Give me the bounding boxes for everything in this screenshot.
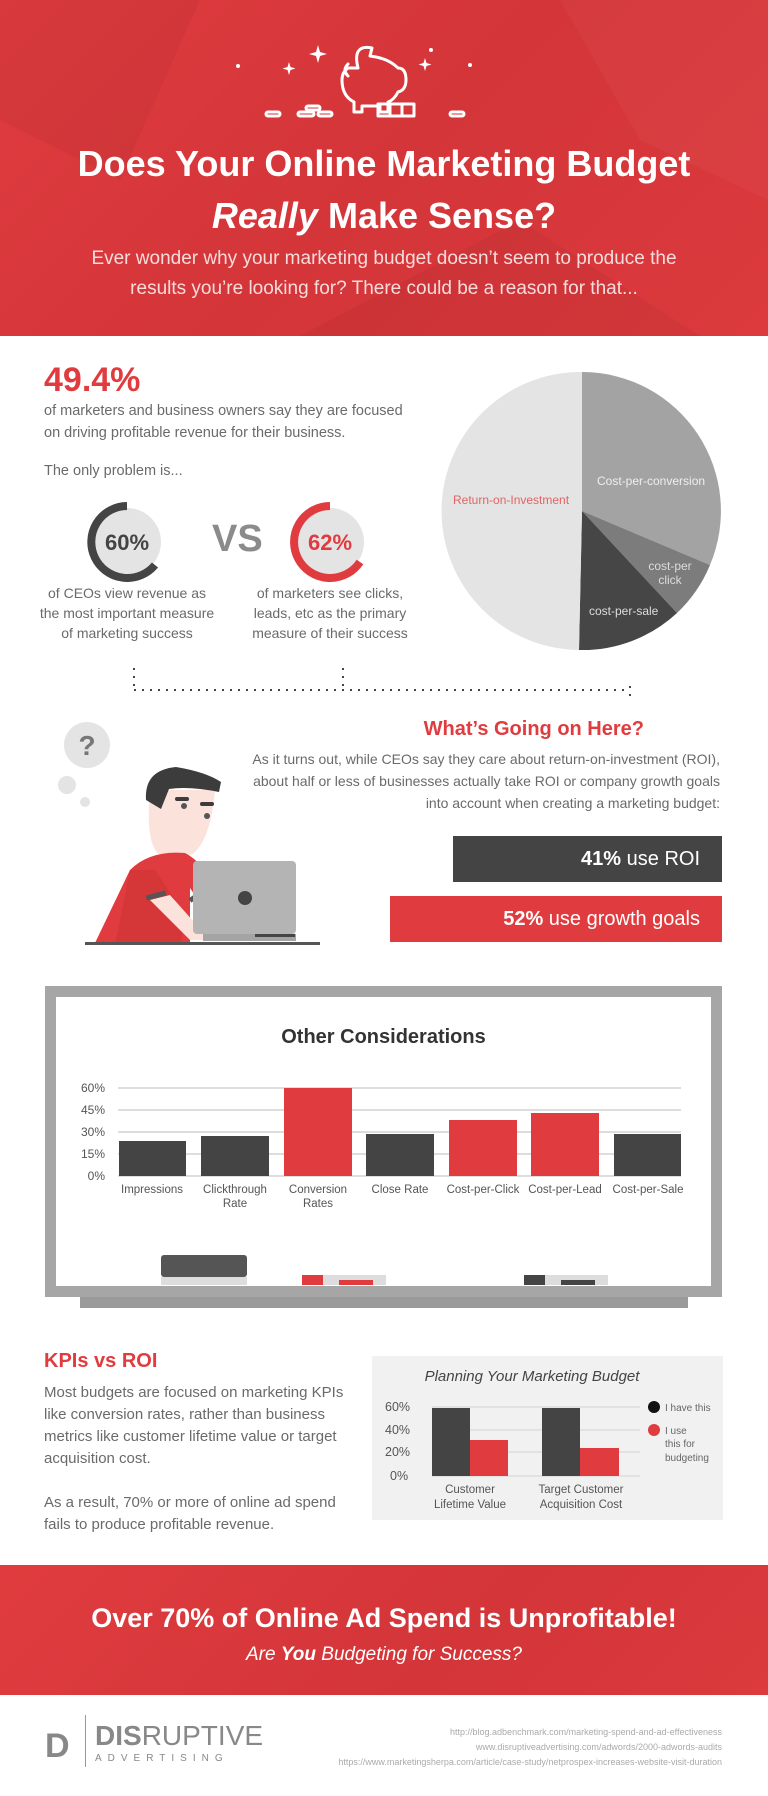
text: kpis: As a result, 70% or more of online ad spend fails to produce profitable revenue.: [44, 1494, 336, 1533]
chart: planning budget: budgeting: [665, 1453, 709, 1464]
chart: planning budget: Lifetime Value: [434, 1499, 506, 1511]
stat 49.4%: 49.4%: [44, 361, 140, 399]
whiteboard: other considerations: [45, 986, 722, 1308]
bar chart: 0%: [88, 1169, 105, 1183]
chart: planning budget: 60%: [385, 1400, 410, 1414]
illustration: man at laptop: [58, 722, 320, 945]
pie chart: Return-on-Investment: [453, 493, 570, 507]
bar chart: 15%: [81, 1147, 105, 1161]
title: [78, 143, 690, 236]
chart: planning budget: Acquisition Cost: [540, 1499, 623, 1511]
logo: D: [45, 1727, 70, 1765]
bar chart: Conversion: [289, 1184, 347, 1196]
illustration: man at laptop: ?: [78, 730, 96, 761]
chart: planning budget: 20%: [385, 1445, 410, 1459]
chart: planning budget: this for: [665, 1439, 696, 1450]
paragraph: roi: about half or less of businesses actually take ROI or company growth goals: [253, 773, 720, 789]
paragraph: roi: As it turns out, while CEOs say they care about return-on-investment (ROI),: [252, 751, 720, 767]
donut: 62%: [252, 502, 408, 641]
logo: [45, 1715, 263, 1767]
bar chart: [81, 1081, 683, 1285]
bar: 41% use ROI: 41% use ROI: [581, 848, 700, 870]
bar chart: Clickthrough: [203, 1184, 267, 1196]
bar chart: Cost-per-Click: [447, 1184, 520, 1196]
chart: planning budget: I use: [665, 1426, 687, 1437]
dotted connector: [133, 668, 631, 696]
bar: 52% use growth goals: [390, 896, 722, 942]
chart: planning budget: I have this: [665, 1403, 711, 1414]
text: of marketing success: [61, 625, 193, 641]
chart: planning budget: Planning Your Marketing Budget: [425, 1368, 640, 1385]
chart: planning budget: Customer: [445, 1484, 495, 1496]
stat 49.4%: The only problem is...: [44, 463, 183, 479]
bar: 41% use ROI: [453, 836, 722, 882]
header: [0, 0, 768, 336]
donut: 62%: leads, etc as the primary: [254, 605, 406, 621]
title: Really Make Sense?: [212, 195, 556, 236]
chart title: Other Considerations: [281, 1026, 486, 1048]
chart: planning budget: 40%: [385, 1423, 410, 1437]
sources: http://blog.adbenchmark.com/marketing-spend-and-ad-effectiveness: [450, 1727, 722, 1737]
donut: 60%: [40, 502, 214, 641]
chart: planning budget: 0%: [390, 1469, 408, 1483]
logo: ADVERTISING: [95, 1753, 229, 1764]
pie chart: [442, 372, 721, 650]
logo: DISRUPTIVE: [95, 1720, 263, 1751]
vs: VS: [212, 518, 263, 560]
sources: [338, 1727, 722, 1767]
bar chart: Close Rate: [372, 1184, 428, 1196]
bar: 52% use growth goals: 52% use growth goals: [503, 908, 700, 930]
banner: conclusion: [0, 1565, 768, 1695]
text: kpis: [44, 1384, 343, 1533]
pie chart: cost-per-sale: [589, 604, 659, 618]
donut: 60%: 60%: [105, 530, 149, 555]
bar chart: 30%: [81, 1125, 105, 1139]
stat 49.4%: on driving profitable revenue for their business.: [44, 425, 345, 441]
bar chart: 60%: [81, 1081, 105, 1095]
bar chart: Impressions: [121, 1184, 183, 1196]
subtitle: [91, 248, 677, 299]
heading: what's going on: What’s Going on Here?: [424, 718, 644, 740]
donut: 62%: of marketers see clicks,: [257, 585, 403, 601]
bar chart: Cost-per-Lead: [528, 1184, 602, 1196]
banner: conclusion: Over 70% of Online Ad Spend is Unprofitable!: [91, 1603, 677, 1633]
bar chart: Cost-per-Sale: [613, 1184, 683, 1196]
stat 49.4%: of marketers and business owners say they are focused: [44, 403, 403, 419]
paragraph: roi: into account when creating a marketing budget:: [426, 795, 720, 811]
banner: conclusion: Are You Budgeting for Success?: [246, 1644, 522, 1665]
pie chart: click: [658, 573, 683, 587]
bar chart: 45%: [81, 1103, 105, 1117]
text: measure of their success: [252, 625, 408, 641]
pie chart: Cost-per-conversion: [597, 474, 705, 488]
paragraph: roi: [252, 751, 720, 811]
donut: 62%: 62%: [308, 530, 352, 555]
donut: 60%: the most important measure: [40, 605, 214, 621]
sources: www.disruptiveadvertising.com/adwords/2000-adwords-audits: [476, 1742, 722, 1752]
title: Does Your Online Marketing Budget: [78, 143, 690, 184]
stat 49.4%: [44, 361, 403, 479]
pie chart: cost-per: [648, 559, 692, 573]
sources: https://www.marketingsherpa.com/article/case-study/netprospex-increases-website-visit-duration: [338, 1757, 722, 1767]
bar chart: Rate: [223, 1198, 247, 1210]
bar chart: Rates: [303, 1198, 333, 1210]
subtitle: results you’re looking for? There could be a reason for that...: [130, 278, 638, 299]
subtitle: Ever wonder why your marketing budget doesn’t seem to produce the: [91, 248, 677, 269]
chart: planning budget: Target Customer: [538, 1484, 624, 1496]
heading: KPIs vs ROI: KPIs vs ROI: [44, 1350, 157, 1372]
icon: piggy bank: [236, 45, 472, 118]
donut: 60%: of CEOs view revenue as: [48, 585, 206, 601]
text: kpis: Most budgets are focused on marketing KPIs like conversion rates, rather than business metrics like customer lifetime value or target acquisition cost.: [44, 1384, 343, 1467]
chart: planning budget: [372, 1356, 723, 1520]
